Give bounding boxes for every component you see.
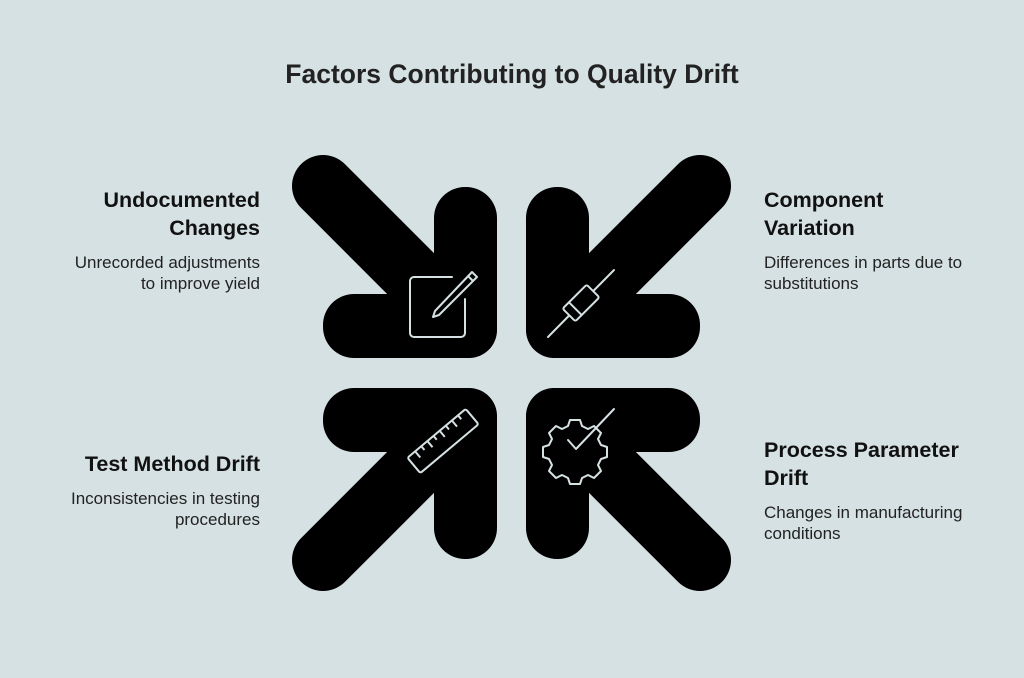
text: component variation xyxy=(764,188,962,293)
title: Factors Contributing to Quality Drift xyxy=(285,59,739,89)
text: component variation: Variation xyxy=(764,216,855,240)
arrow: bottom-left xyxy=(323,388,497,560)
text: process parameter drift: Drift xyxy=(764,466,808,490)
text: undocumented changes: Unrecorded adjustments xyxy=(75,253,260,272)
text: undocumented changes xyxy=(75,188,260,293)
text: test method drift: Inconsistencies in testing xyxy=(71,489,260,508)
text: test method drift: Test Method Drift xyxy=(85,452,260,476)
text: component variation: Differences in parts due to xyxy=(764,253,962,272)
text: test method drift: procedures xyxy=(175,510,260,529)
arrow: bottom-right xyxy=(526,388,700,560)
text: undocumented changes: to improve yield xyxy=(141,274,260,293)
text: process parameter drift: Process Parameter xyxy=(764,438,959,462)
text: undocumented changes: Changes xyxy=(169,216,260,240)
icon: gear with check xyxy=(543,409,614,484)
arrow: top-right xyxy=(526,186,700,358)
icon: pencil edit xyxy=(410,272,477,337)
text: process parameter drift xyxy=(764,438,962,543)
arrow: top-left xyxy=(323,186,497,358)
icon: ruler xyxy=(407,409,479,473)
text: undocumented changes: Undocumented xyxy=(104,188,260,212)
text: component variation: Component xyxy=(764,188,883,212)
icon: diode xyxy=(548,270,614,337)
text: process parameter drift: conditions xyxy=(764,524,841,543)
text: test method drift xyxy=(71,452,260,529)
text: component variation: substitutions xyxy=(764,274,858,293)
text: process parameter drift: Changes in manufacturing xyxy=(764,503,962,522)
